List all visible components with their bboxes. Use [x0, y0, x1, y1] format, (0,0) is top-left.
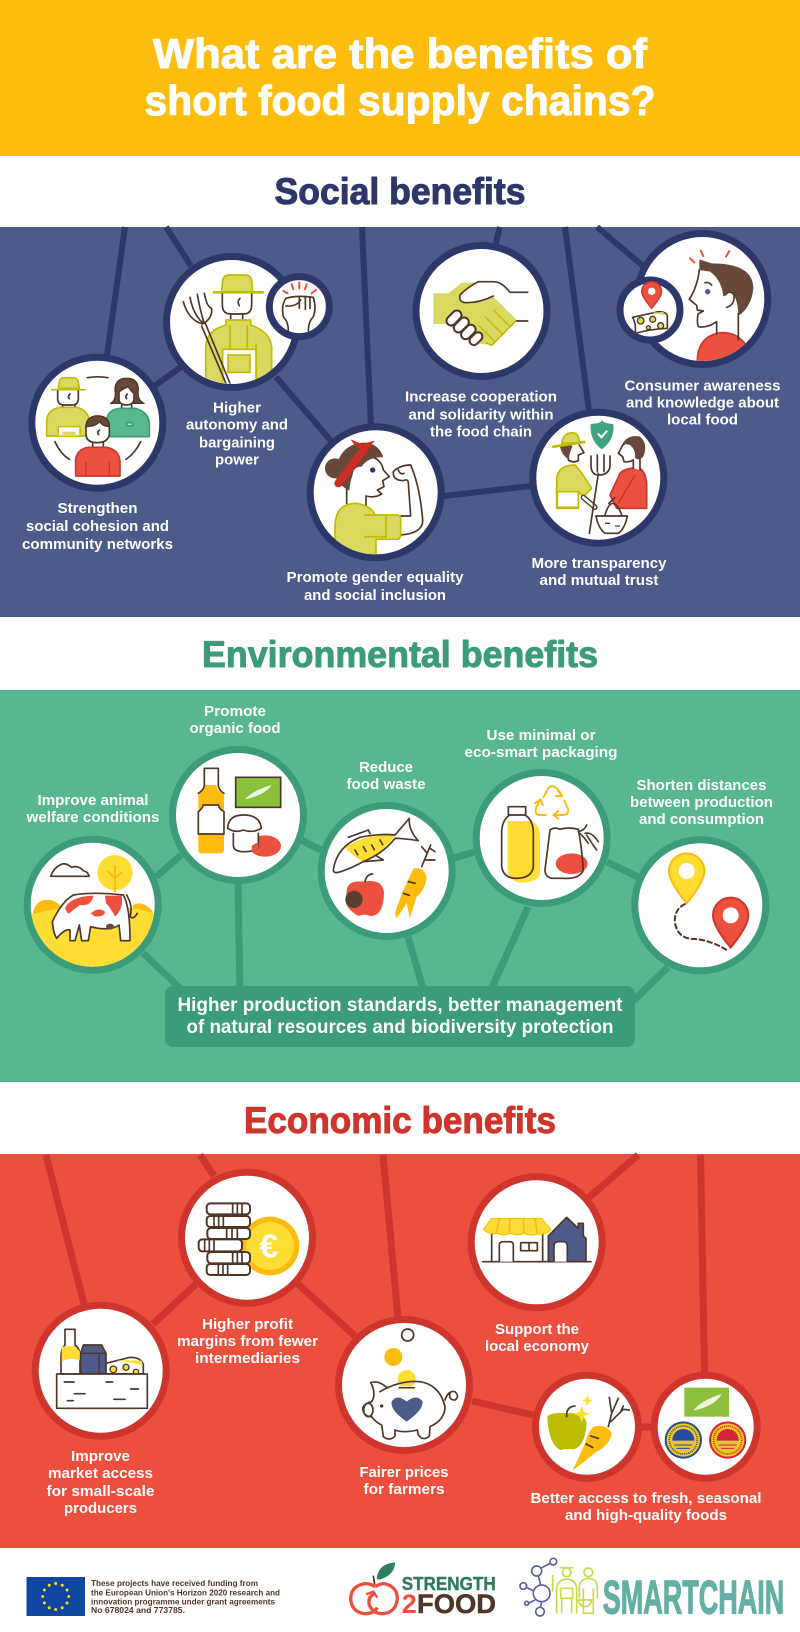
label: organic food: organic food — [190, 720, 280, 737]
label: consumer awareness — [624, 378, 780, 428]
icon: local cheese with pin — [620, 280, 680, 340]
icon: quality labels — [654, 1375, 757, 1478]
label: cooperation: the food chain — [430, 424, 532, 440]
icon: fish, apple and carrot — [321, 806, 452, 936]
label: profit margins: margins from fewer — [177, 1333, 318, 1350]
icon: community group — [32, 357, 163, 488]
icon: EU flag — [26, 1577, 85, 1616]
label: animal welfare — [25, 792, 159, 826]
label: fresh foods — [530, 1490, 762, 1524]
heading: social benefits: Social benefits — [274, 171, 526, 212]
icon: raised fist — [269, 277, 329, 337]
icon: pepper and carrot — [536, 1375, 638, 1478]
label: local economy: Support the — [495, 1321, 579, 1338]
heading: environmental benefits: Environmental benefits — [202, 634, 598, 675]
label: autonomy: autonomy and — [186, 416, 288, 434]
icon: money stack and euro coin: € — [260, 1228, 278, 1265]
label: food waste: food waste — [346, 776, 426, 793]
footer: EU funding — [26, 1577, 280, 1616]
icon: map pins and route — [635, 840, 766, 971]
label: profit margins: Higher profit — [202, 1316, 293, 1333]
icon: consumer with raised attention — [637, 234, 768, 364]
label: packaging — [464, 727, 618, 761]
label: organic food — [190, 703, 280, 737]
icon: handshake — [416, 246, 547, 376]
label: distances: and consumption — [639, 811, 764, 828]
panel: environmental benefits — [0, 690, 800, 1082]
label: autonomy — [186, 400, 288, 468]
title banner: short food supply chains? — [144, 77, 656, 124]
label: market access: Improve — [71, 1448, 130, 1465]
label: market access: for small-scale — [46, 1483, 154, 1500]
title banner — [0, 0, 800, 156]
label: consumer awareness: and knowledge about — [626, 394, 779, 412]
label: animal welfare: Improve animal — [38, 792, 148, 809]
label: fairer prices — [360, 1464, 448, 1498]
label: fresh foods: and high-quality foods — [565, 1507, 727, 1524]
label: autonomy: bargaining — [199, 434, 275, 452]
label: distances: Shorten distances — [636, 777, 766, 794]
label: autonomy: power — [215, 452, 259, 468]
label: social cohesion: Strengthen — [58, 500, 138, 517]
label: packaging: Use minimal or — [486, 727, 596, 744]
label: distances — [630, 777, 773, 828]
label: consumer awareness: local food — [667, 412, 738, 428]
logo: SmartChain — [520, 1558, 784, 1624]
icon: transparency farmer and customer — [533, 412, 664, 543]
label: social cohesion: community networks — [22, 536, 173, 553]
logo: Strength2Food: STRENGTH — [402, 1573, 496, 1594]
label: consumer awareness: Consumer awareness — [624, 378, 780, 394]
callout: production standards — [165, 986, 635, 1047]
label: cooperation: and solidarity within — [408, 406, 554, 424]
label: local economy — [485, 1321, 590, 1355]
panel: economic benefits — [0, 1154, 800, 1548]
label: gender equality: and social inclusion — [304, 587, 446, 604]
label: profit margins — [177, 1316, 318, 1367]
label: cooperation: Increase cooperation — [405, 388, 557, 406]
label: fairer prices: for farmers — [364, 1481, 444, 1498]
label: fairer prices: Fairer prices — [360, 1464, 448, 1481]
logo: Strength2Food: FOOD — [417, 1589, 496, 1619]
label: social cohesion — [22, 500, 173, 553]
logo: Strength2Food: 2 — [402, 1589, 417, 1619]
seal: red PDO — [709, 1421, 746, 1459]
label: market access — [46, 1448, 154, 1517]
icon: organic bottle, jar and label — [172, 750, 304, 880]
label: market access: producers — [64, 1500, 137, 1517]
icon: cow in field — [27, 839, 158, 972]
label: social cohesion: social cohesion and — [26, 518, 169, 535]
heading: economic benefits: Economic benefits — [244, 1100, 556, 1141]
icon: market crate — [35, 1305, 166, 1436]
funding text — [91, 1578, 280, 1615]
label: market access: market access — [48, 1465, 153, 1482]
seal: blue PGI — [665, 1421, 702, 1459]
label: local economy: local economy — [485, 1338, 590, 1355]
label: gender equality — [286, 569, 464, 604]
callout: production standards: of natural resources and biodiversity protection — [186, 1017, 614, 1038]
funding text: the European Union's Horizon 2020 research and — [91, 1588, 280, 1598]
panel: social benefits — [0, 227, 800, 617]
icon: shop and house — [471, 1177, 602, 1308]
label: profit margins: intermediaries — [195, 1350, 300, 1367]
icon: packaging and recycling — [476, 772, 607, 904]
label: food waste: Reduce — [359, 759, 413, 776]
callout: production standards: Higher production standards, better management — [178, 995, 623, 1016]
funding text: innovation programme under grant agreements — [91, 1596, 275, 1606]
label: cooperation — [405, 388, 557, 440]
label: gender equality: Promote gender equality — [286, 569, 464, 586]
label: animal welfare: welfare conditions — [25, 809, 159, 826]
logo: Strength2Food — [351, 1562, 496, 1619]
icon: farmer with pitchfork — [166, 256, 298, 388]
label: transparency — [532, 555, 667, 589]
funding text: No 678024 and 773785. — [91, 1605, 185, 1615]
label: transparency: More transparency — [532, 555, 667, 572]
label: transparency: and mutual trust — [540, 572, 658, 589]
label: packaging: eco-smart packaging — [464, 744, 618, 761]
label: organic food: Promote — [204, 703, 266, 720]
label: distances: between production — [630, 794, 773, 811]
icon: piggy bank — [338, 1320, 470, 1450]
label: fresh foods: Better access to fresh, seasonal — [530, 1490, 762, 1507]
label: autonomy: Higher — [213, 400, 261, 416]
title banner: What are the benefits of — [153, 30, 648, 77]
label: food waste — [346, 759, 426, 793]
icon: woman flexing arm — [310, 427, 441, 558]
icon: money stack and euro coin — [182, 1172, 312, 1303]
funding text: These projects have received funding from — [91, 1578, 258, 1588]
